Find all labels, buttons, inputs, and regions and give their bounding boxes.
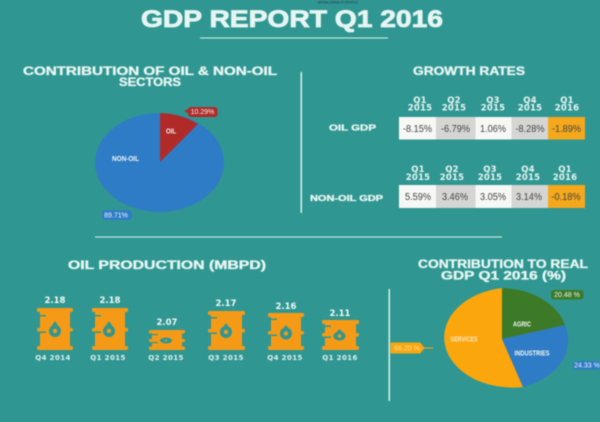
callout: services share: 66.20 % — [394, 346, 420, 352]
heading: contribution to real gdp: GDP Q1 2016 (%) — [441, 270, 566, 282]
non-oil gdp quarter headers: Q2 — [445, 165, 459, 175]
pie chart: sector contribution: AGRIC — [513, 322, 531, 328]
non-oil gdp quarter headers: 2016 — [553, 173, 577, 183]
oil gdp quarter headers: 2015 — [408, 104, 432, 114]
oil gdp quarter headers: Q1 — [413, 96, 427, 106]
pie chart: sector contribution — [444, 288, 568, 388]
barrel: Q1 2015 — [90, 296, 128, 362]
oil gdp table row: -1.89% — [552, 124, 581, 135]
barrel: Q4 2015: 2.16 — [276, 302, 297, 312]
heading: contribution of oil and non-oil: SECTORS — [119, 77, 181, 89]
non-oil gdp quarter headers: Q1 — [558, 165, 572, 175]
oil gdp quarter headers: Q2 — [447, 96, 461, 106]
oil gdp table row: -8.28% — [516, 124, 545, 135]
non-oil gdp table row: -0.18% — [552, 192, 581, 203]
heading: growth rates: GROWTH RATES — [413, 66, 525, 78]
barrel: Q2 2015: 2.07 — [157, 318, 178, 328]
panel: contribution to real gdp — [391, 259, 600, 388]
non-oil gdp quarter headers: Q3 — [483, 165, 497, 175]
barrel: Q2 2015 — [148, 318, 185, 362]
pie chart: oil vs non-oil — [95, 113, 224, 212]
source note: NATIONAL BUREAU OF STATISTICS — [318, 0, 358, 4]
oil gdp table row — [399, 117, 585, 140]
panel: oil production — [35, 260, 359, 362]
panel: contribution of oil and non-oil sectors — [23, 66, 277, 220]
oil gdp quarter headers: 2015 — [481, 104, 505, 114]
barrel: Q4 2015: Q4 2015 — [267, 354, 303, 362]
barrel: Q3 2015: 2.17 — [216, 299, 237, 309]
pie chart: sector contribution: INDUSTRIES — [514, 350, 550, 358]
barrel: Q4 2014: Q4 2014 — [35, 354, 71, 362]
oil gdp table row: -6.79% — [441, 124, 470, 135]
non-oil gdp quarter headers — [406, 165, 577, 183]
pie chart: sector contribution: SERVICES — [450, 336, 478, 344]
oil gdp table row: 1.06% — [480, 124, 506, 135]
callout: agriculture share — [551, 290, 584, 300]
non-oil gdp quarter headers: 2015 — [478, 173, 502, 183]
title: GDP REPORT Q1 2016 — [141, 6, 443, 33]
callout: agriculture share: 20.48 % — [554, 292, 580, 299]
non-oil gdp row label: NON-OIL GDP — [310, 193, 383, 203]
barrel: Q4 2014: 2.18 — [45, 296, 66, 306]
oil gdp quarter headers: 2015 — [442, 104, 466, 114]
non-oil gdp quarter headers: Q1 — [411, 165, 425, 175]
heading: contribution of oil and non-oil: CONTRIBUTION OF OIL & NON-OIL — [23, 66, 277, 78]
oil gdp quarter headers — [408, 96, 579, 114]
non-oil gdp table row: 3.46% — [442, 192, 468, 203]
non-oil gdp quarter headers: Q4 — [521, 165, 535, 175]
oil gdp quarter headers: Q3 — [486, 96, 500, 106]
oil gdp quarter headers: Q4 — [523, 96, 537, 106]
heading: contribution to real gdp — [418, 259, 588, 282]
barrel: Q1 2016: 2.11 — [330, 309, 351, 319]
barrel: Q4 2014 — [35, 296, 73, 362]
barrel: Q3 2015: Q3 2015 — [208, 354, 244, 362]
heading: contribution of oil and non-oil — [23, 66, 277, 89]
barrel: Q1 2016 — [322, 309, 359, 362]
non-oil gdp quarter headers: 2015 — [440, 173, 464, 183]
barrel: Q4 2015 — [267, 302, 304, 362]
non-oil gdp quarter headers: 2015 — [406, 173, 430, 183]
non-oil gdp table row — [399, 185, 585, 208]
oil gdp quarter headers: Q1 — [560, 96, 574, 106]
barrel: Q1 2015: 2.18 — [100, 296, 121, 306]
callout: oil share — [184, 107, 218, 117]
oil gdp table row: -8.15% — [403, 124, 432, 135]
non-oil gdp table row: 3.05% — [480, 192, 506, 203]
oil gdp row label: OIL GDP — [329, 122, 376, 132]
callout: oil share: 10.29% — [191, 109, 214, 116]
barrel: Q1 2016: Q1 2016 — [322, 354, 358, 362]
callout: services share — [391, 343, 433, 353]
non-oil gdp table row: 5.59% — [405, 192, 431, 203]
oil gdp quarter headers: 2016 — [555, 104, 579, 114]
non-oil gdp table row: 3.14% — [516, 192, 542, 203]
heading: oil production: OIL PRODUCTION (MBPD) — [68, 260, 266, 272]
callout: non-oil share — [102, 210, 132, 220]
non-oil gdp quarter headers: 2015 — [516, 173, 540, 183]
barrel: Q1 2015: Q1 2015 — [90, 354, 126, 362]
callout: non-oil share: 89.71% — [104, 212, 128, 220]
barrel: Q3 2015 — [208, 299, 245, 362]
pie chart: oil vs non-oil: OIL — [166, 128, 177, 136]
oil gdp quarter headers: 2015 — [518, 104, 542, 114]
barrel: Q2 2015: Q2 2015 — [148, 354, 184, 362]
panel: growth rates — [310, 66, 585, 208]
callout: industries share: 24.33 % — [574, 362, 600, 370]
heading: contribution to real gdp: CONTRIBUTION TO REAL — [418, 259, 588, 271]
pie chart: oil vs non-oil: NON-OIL — [112, 156, 140, 163]
